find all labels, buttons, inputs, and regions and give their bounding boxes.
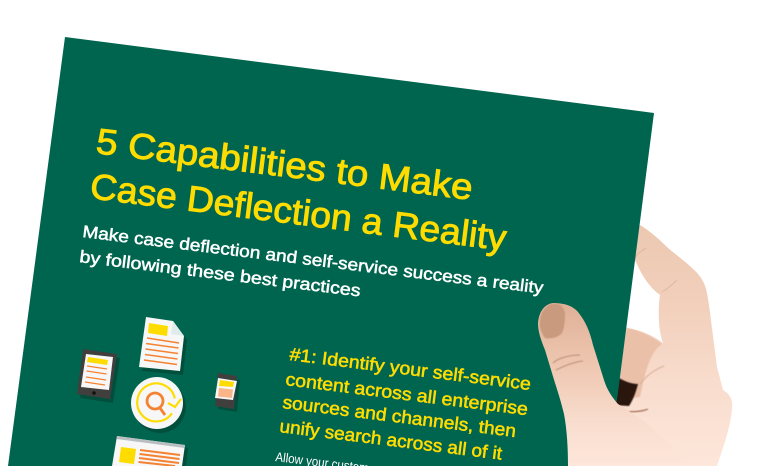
gap between fingers [615, 255, 663, 343]
subtitle: by following these best practices [79, 247, 362, 300]
thumb [538, 303, 690, 466]
heading: capability 1: sources and channels, then [282, 392, 517, 441]
hand behind the page [560, 225, 732, 466]
icon: tablet [77, 349, 120, 403]
heading: capability 1: unify search across all of it [279, 416, 503, 464]
title: 5 Capabilities to Make [94, 120, 475, 208]
panel: green page [8, 37, 654, 466]
title [88, 120, 509, 258]
icon: document [139, 317, 187, 375]
heading: capability 1: content across all enterprise [285, 369, 529, 419]
icon: browser window [112, 436, 188, 466]
subtitle: Make case deflection and self-service success a reality [82, 222, 545, 298]
title: Case Deflection a Reality [88, 165, 509, 258]
icon: search refresh circle [131, 377, 186, 433]
heading: capability 1 [279, 344, 532, 464]
heading: capability 1: #1: Identify your self-service [289, 344, 532, 394]
icon: phone [215, 373, 240, 412]
